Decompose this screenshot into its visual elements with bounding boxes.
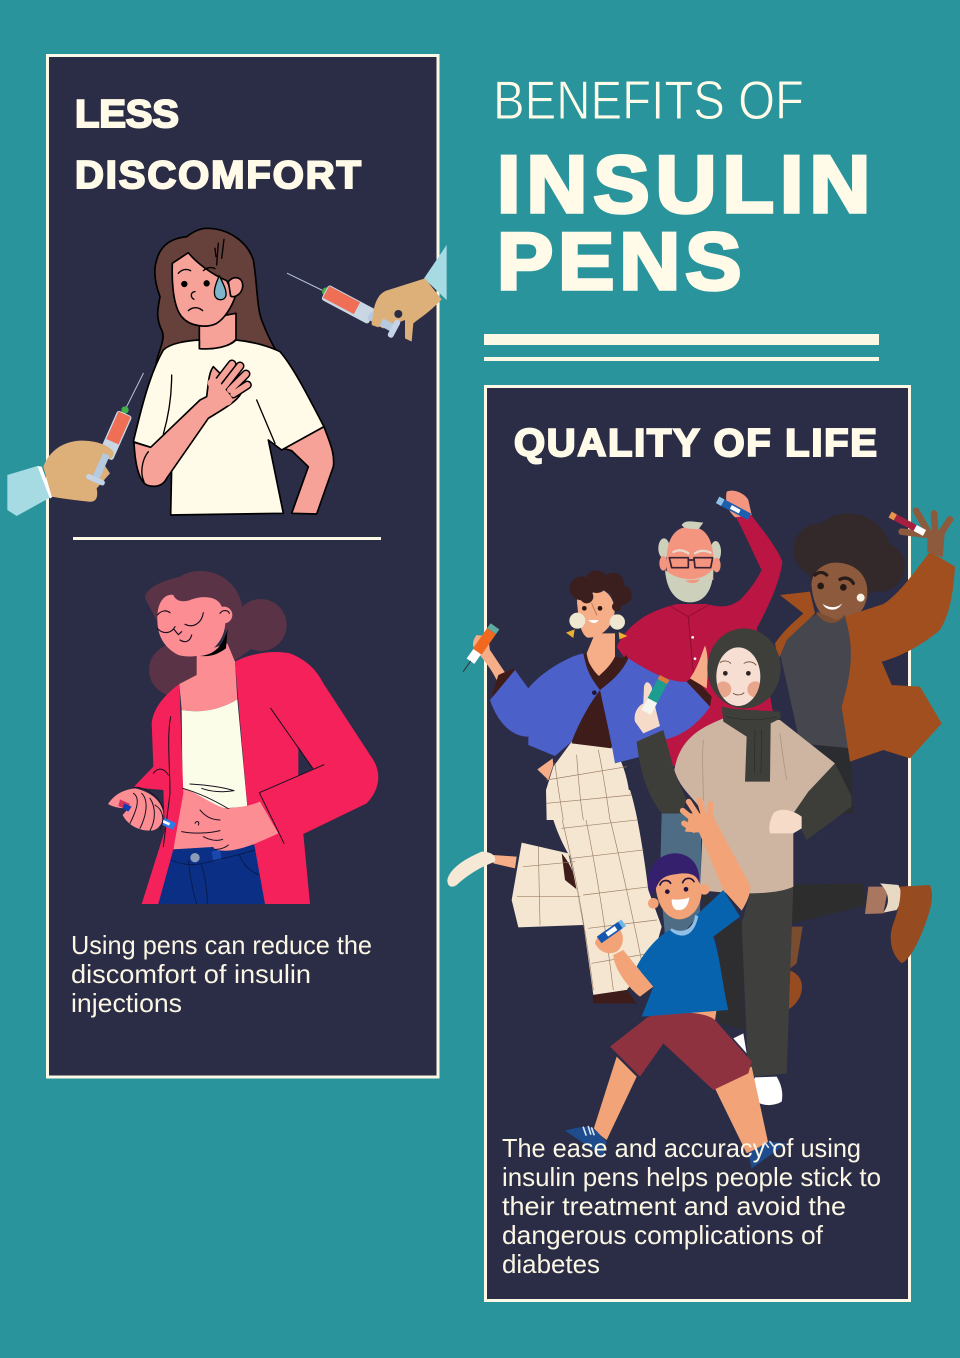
title: PENS xyxy=(497,215,741,307)
pen xyxy=(122,800,176,830)
syringe and hand bottom left xyxy=(7,373,143,516)
top xyxy=(182,699,247,809)
fingers xyxy=(213,364,247,400)
hair xyxy=(145,571,287,696)
illustration: group of people with insulin pens xyxy=(447,491,955,1168)
person: woman in hijab xyxy=(635,628,932,1105)
title: BENEFITS OF xyxy=(493,69,804,131)
body text: quality of life: dangerous complications of xyxy=(502,1220,824,1250)
belly xyxy=(173,788,255,849)
body text: quality of life: their treatment and avoid the xyxy=(502,1191,846,1221)
person: woman in blue jacket xyxy=(447,570,712,1003)
divider xyxy=(73,537,381,540)
body text: less discomfort: discomfort of insulin xyxy=(71,959,311,989)
heading: quality of life: QUALITY OF LIFE xyxy=(514,422,877,465)
illustration: woman using insulin pen xyxy=(108,571,378,904)
heading: less discomfort: DISCOMFORT xyxy=(75,154,361,197)
title: INSULIN xyxy=(497,138,870,230)
woman figure xyxy=(133,228,334,515)
hand right xyxy=(181,802,278,851)
person: boy xyxy=(565,800,787,1168)
body text: less discomfort: injections xyxy=(71,988,182,1018)
person: older man xyxy=(617,491,782,953)
heading: less discomfort xyxy=(75,93,361,197)
heading: less discomfort: LESS xyxy=(75,93,179,136)
hand left xyxy=(108,788,163,831)
chest and neck xyxy=(179,643,237,711)
person: woman in brown jacket xyxy=(775,511,955,813)
syringe and hand top right xyxy=(287,245,447,342)
panel: less discomfort xyxy=(48,56,438,1077)
body text: quality of life: diabetes xyxy=(502,1249,600,1279)
title xyxy=(493,69,870,307)
body text: less discomfort: Using pens can reduce the xyxy=(71,930,372,960)
panel: quality of life xyxy=(486,386,910,1300)
illustration: worried woman with syringes xyxy=(7,228,447,516)
body text: quality of life: The ease and accuracy of using xyxy=(502,1133,861,1163)
jeans xyxy=(158,844,265,904)
cardigan xyxy=(133,684,183,904)
divider double lines xyxy=(484,334,879,361)
body text: quality of life: insulin pens helps people stick to xyxy=(502,1162,881,1192)
face xyxy=(157,595,225,657)
body text: less discomfort xyxy=(71,930,372,1018)
folds xyxy=(183,784,234,809)
body text: quality of life xyxy=(502,1133,881,1279)
